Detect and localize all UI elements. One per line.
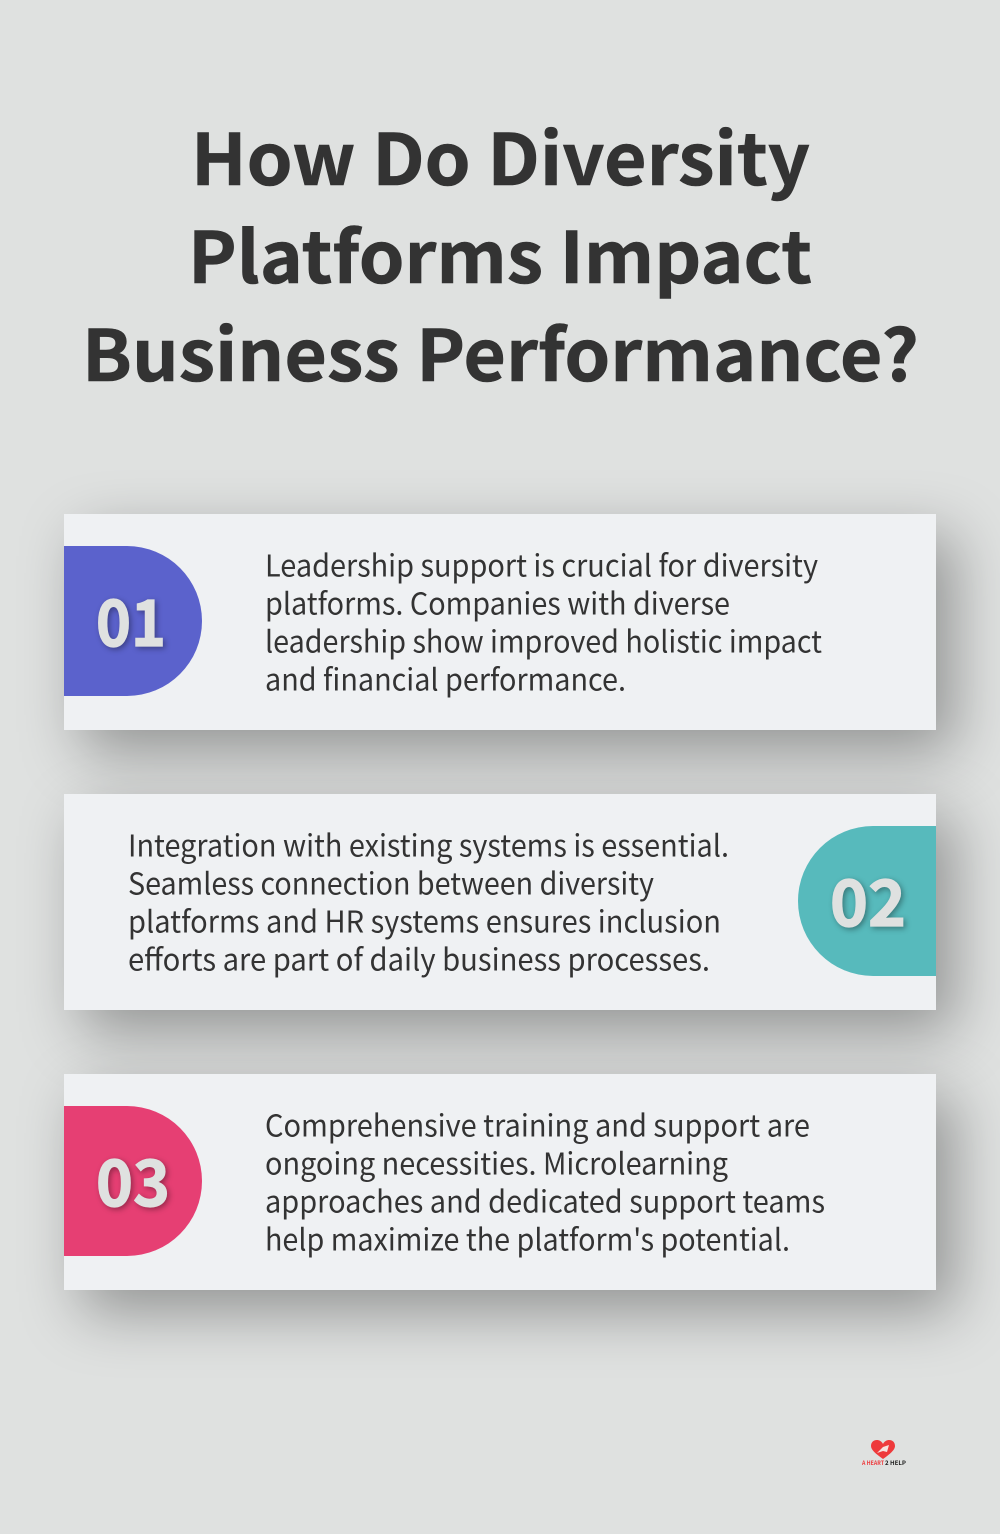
text block 02: Seamless connection between diversity xyxy=(128,860,654,904)
number 01: 01 xyxy=(96,573,166,665)
text block 01 xyxy=(265,542,822,700)
panel: step 02 xyxy=(64,794,936,1010)
icon: heart with hands xyxy=(871,1440,895,1459)
title: Platforms Impact xyxy=(188,202,812,304)
text block 01: leadership show improved holistic impact xyxy=(265,618,822,662)
number badge 02 xyxy=(798,826,936,976)
text block 01: and financial performance. xyxy=(265,656,626,700)
text block 01: platforms. Companies with diverse xyxy=(265,580,730,624)
logo wordmark: A HEART xyxy=(861,1458,884,1467)
number 03: 03 xyxy=(96,1133,170,1225)
logo: A Heart 2 Help xyxy=(861,1440,906,1467)
text block 03: help maximize the platform's potential. xyxy=(265,1216,790,1260)
text block 03: approaches and dedicated support teams xyxy=(265,1178,825,1222)
title xyxy=(82,104,919,402)
panel: step 01 xyxy=(64,514,936,730)
card background 03 xyxy=(64,1074,936,1290)
text block 02: efforts are part of daily business processes. xyxy=(128,936,710,980)
text block 02 xyxy=(128,822,729,980)
logo: A Heart 2 Help: 2 HELP xyxy=(885,1458,906,1467)
number badge 01 xyxy=(64,546,202,696)
text block 03: ongoing necessities. Microlearning xyxy=(265,1140,728,1184)
number badge 03 xyxy=(64,1106,202,1256)
text block 01: Leadership support is crucial for diversity xyxy=(265,542,818,586)
text block 02: platforms and HR systems ensures inclusion xyxy=(128,898,721,942)
number 02: 02 xyxy=(830,853,906,945)
card background 02 xyxy=(64,794,936,1010)
text block 03: Comprehensive training and support are xyxy=(265,1102,810,1146)
title: Business Performance? xyxy=(82,300,919,402)
title: How Do Diversity xyxy=(191,104,810,206)
text block 02: Integration with existing systems is essential. xyxy=(128,822,729,866)
panel: step 03 xyxy=(64,1074,936,1290)
card background 01 xyxy=(64,514,936,730)
text block 03 xyxy=(265,1102,825,1260)
